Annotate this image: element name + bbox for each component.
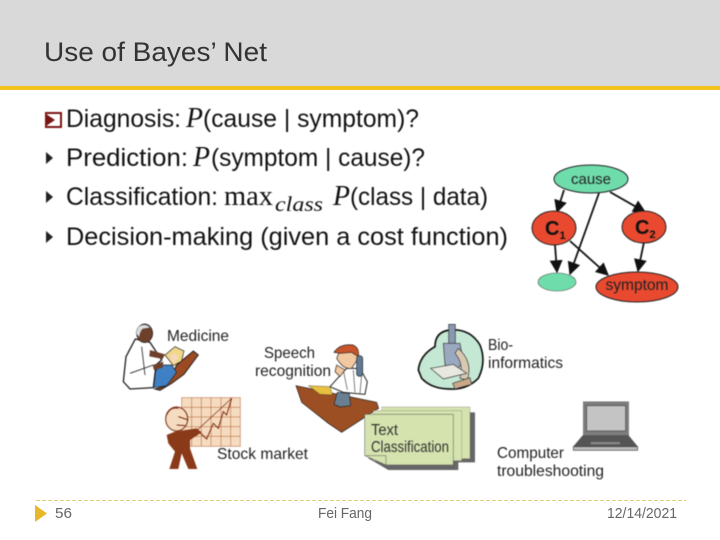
footer <box>35 500 686 522</box>
item: diagnosis <box>66 103 419 134</box>
item: diagnosis: (cause | symptom)? <box>203 105 419 133</box>
label: speech recognition: Speech <box>264 345 315 362</box>
illustration: speech recognition <box>255 345 379 432</box>
item: prediction <box>46 142 425 173</box>
bullet list <box>46 103 508 251</box>
node: C1: 1 <box>559 230 566 242</box>
label: bioinformatics: informatics <box>488 355 563 372</box>
edges <box>555 190 645 275</box>
illustration: computer troubleshooting <box>497 402 638 480</box>
item: classification: (class | data) <box>350 183 488 211</box>
label: speech recognition <box>255 345 331 380</box>
date: 12/14/2021 <box>607 505 677 522</box>
author: Fei Fang <box>318 505 372 522</box>
item: prediction: Prediction: <box>66 144 188 172</box>
item: decision-making: Decision-making (given a cost function) <box>66 223 508 251</box>
item: diagnosis: P <box>185 103 203 134</box>
icon: stacked documents <box>365 407 475 470</box>
node: C2: C <box>635 217 649 239</box>
item: classification: max <box>224 181 273 212</box>
icon: chart and presenter <box>166 398 240 469</box>
icon: laptop <box>573 402 638 450</box>
label: stock market: Stock market <box>217 446 309 463</box>
header band <box>0 0 720 90</box>
label: bioinformatics <box>488 337 563 372</box>
label: computer troubleshooting <box>497 445 604 480</box>
label: computer troubleshooting: Computer <box>497 445 565 462</box>
label: text classification <box>371 422 449 456</box>
item: classification <box>46 181 488 216</box>
item: classification: Classification: <box>66 183 218 211</box>
bayes network diagram <box>532 165 678 302</box>
icon: footer arrow <box>35 505 47 522</box>
node: symptom: symptom <box>606 277 668 294</box>
item: prediction: (symptom | cause)? <box>211 144 425 172</box>
illustration: medicine <box>123 324 229 390</box>
item: diagnosis: Diagnosis: <box>66 105 181 133</box>
label: computer troubleshooting: troubleshooting <box>497 463 604 480</box>
illustration: bioinformatics <box>418 324 563 389</box>
node: C1: C <box>545 218 559 240</box>
label: medicine: Medicine <box>167 328 229 345</box>
node: unnamed <box>538 273 576 291</box>
title: Use of Bayes’ Net <box>44 37 268 67</box>
node: C2: 2 <box>649 229 656 241</box>
illustration: text classification <box>365 407 475 470</box>
node: C2 <box>622 211 666 243</box>
bullet: hollow square marker <box>46 113 61 127</box>
node: cause: cause <box>571 171 611 188</box>
illustration: stock market <box>166 398 309 469</box>
label: bioinformatics: Bio- <box>488 337 513 354</box>
label: speech recognition: recognition <box>255 363 331 380</box>
page number: 56 <box>55 505 72 522</box>
icon: man on phone at desk <box>296 345 379 432</box>
node: C1 <box>532 211 576 245</box>
item: classification: class <box>275 192 323 216</box>
icon: doctor and patient <box>123 324 198 390</box>
node: cause <box>554 165 628 193</box>
icon: microscope on green blob <box>418 324 483 389</box>
label: text classification: Text <box>371 422 399 439</box>
item: prediction: P <box>192 142 210 173</box>
item: classification: P <box>332 181 350 212</box>
label: text classification: Classification <box>371 439 449 456</box>
node: symptom <box>596 272 678 302</box>
